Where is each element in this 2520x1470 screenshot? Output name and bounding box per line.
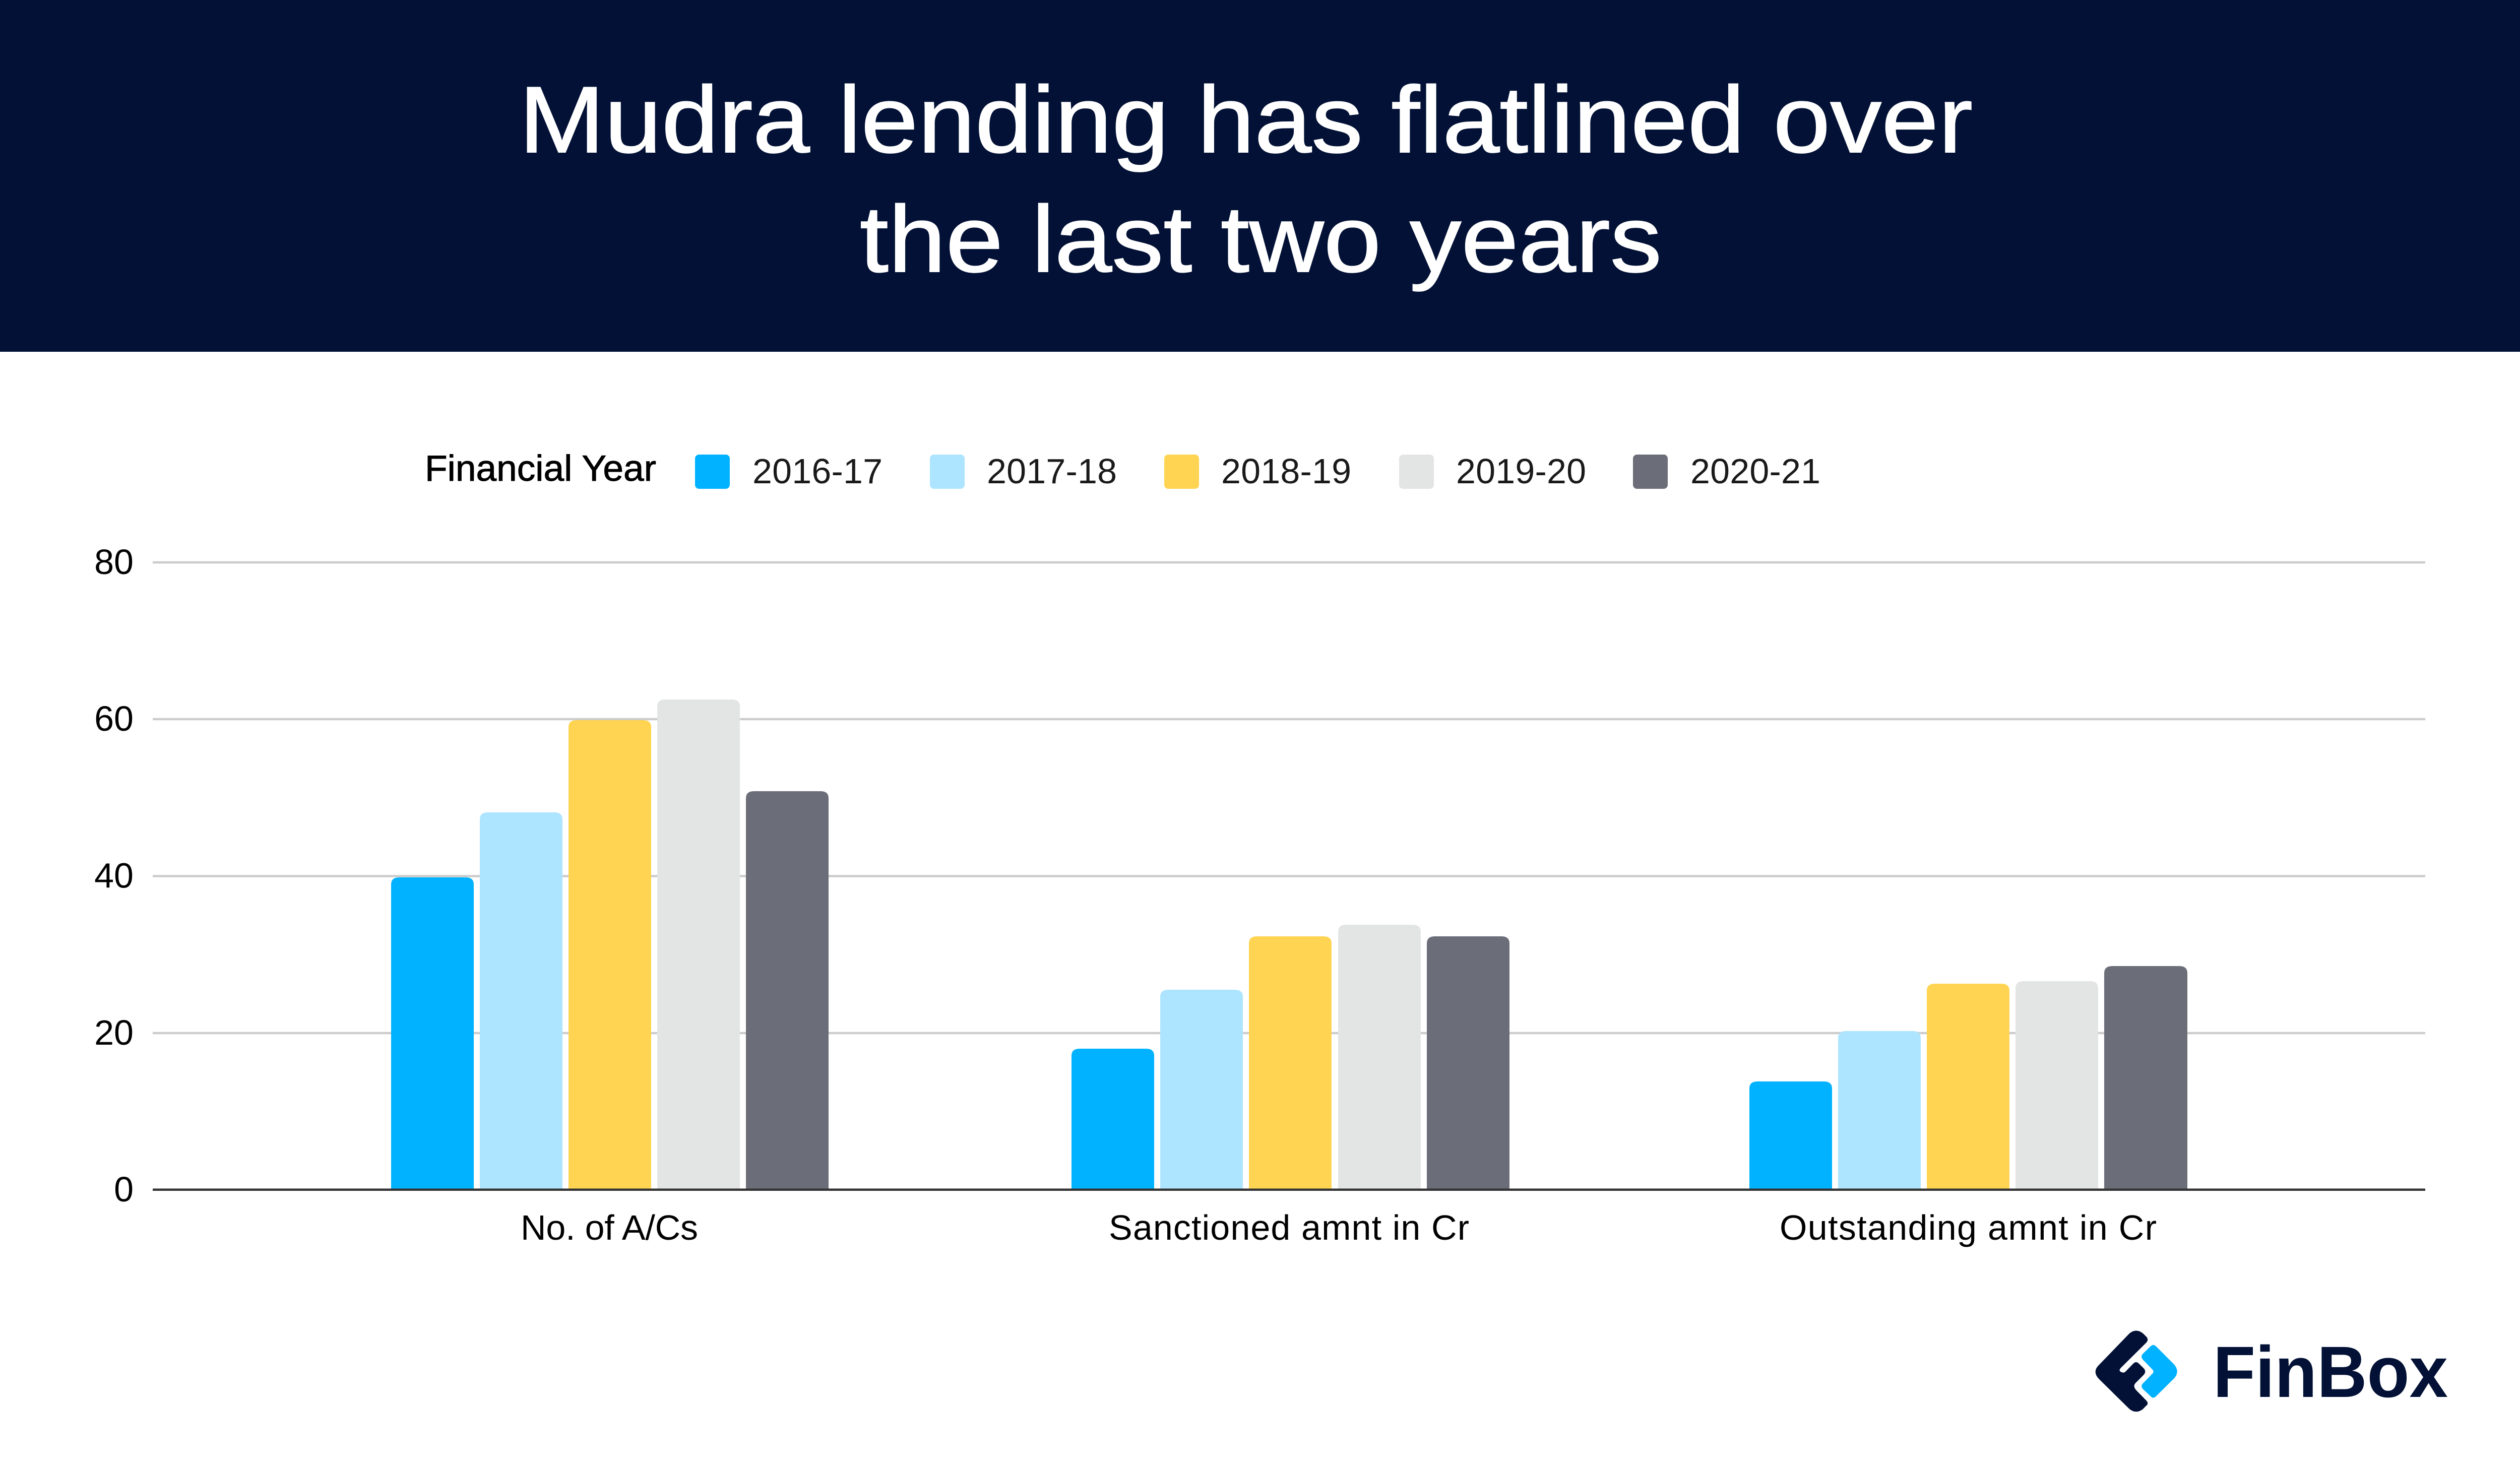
y axis labels: 60 — [94, 699, 134, 738]
category labels: Outstanding amnt in Cr — [1780, 1208, 2157, 1247]
legend item: 2017-18 — [930, 452, 1117, 491]
logo: FinBox — [2096, 1330, 2448, 1413]
legend item: 2016-17: 2016-17 — [752, 452, 883, 491]
legend item: 2020-21: 2020-21 — [1690, 452, 1820, 491]
legend item: 2016-17 — [695, 452, 883, 491]
bars: Sanctioned amnt in Cr — [1072, 925, 1509, 1189]
bar chart — [94, 542, 2425, 1247]
legend item: 2019-20: 2019-20 — [1456, 452, 1586, 491]
title: Mudra lending has flatlined over — [519, 67, 1973, 172]
category labels — [521, 1208, 2157, 1247]
legend item: 2020-21 — [1633, 452, 1820, 491]
y axis labels: 40 — [94, 856, 134, 895]
title: the last two years — [860, 186, 1662, 292]
logo wordmark: FinBox — [2213, 1331, 2448, 1413]
legend title: Financial Year — [425, 449, 656, 489]
legend item: 2017-18: 2017-18 — [987, 452, 1117, 491]
legend item: 2018-19 — [1164, 452, 1351, 491]
bars: Outstanding amnt in Cr — [1749, 966, 2187, 1189]
bars: No. of A/Cs — [391, 699, 829, 1189]
icon: FinBox mark — [2096, 1330, 2177, 1412]
legend item: 2018-19: 2018-19 — [1221, 452, 1351, 491]
category labels: Sanctioned amnt in Cr — [1109, 1208, 1469, 1247]
header band — [0, 0, 2520, 352]
legend — [425, 449, 1820, 491]
x axis line — [153, 1188, 2425, 1191]
y axis labels: 0 — [114, 1170, 134, 1209]
category labels: No. of A/Cs — [521, 1208, 698, 1247]
legend item: 2019-20 — [1399, 452, 1586, 491]
y axis labels: 80 — [94, 542, 134, 582]
title — [519, 67, 1973, 292]
y axis labels — [94, 542, 134, 1209]
y axis labels: 20 — [94, 1013, 134, 1052]
